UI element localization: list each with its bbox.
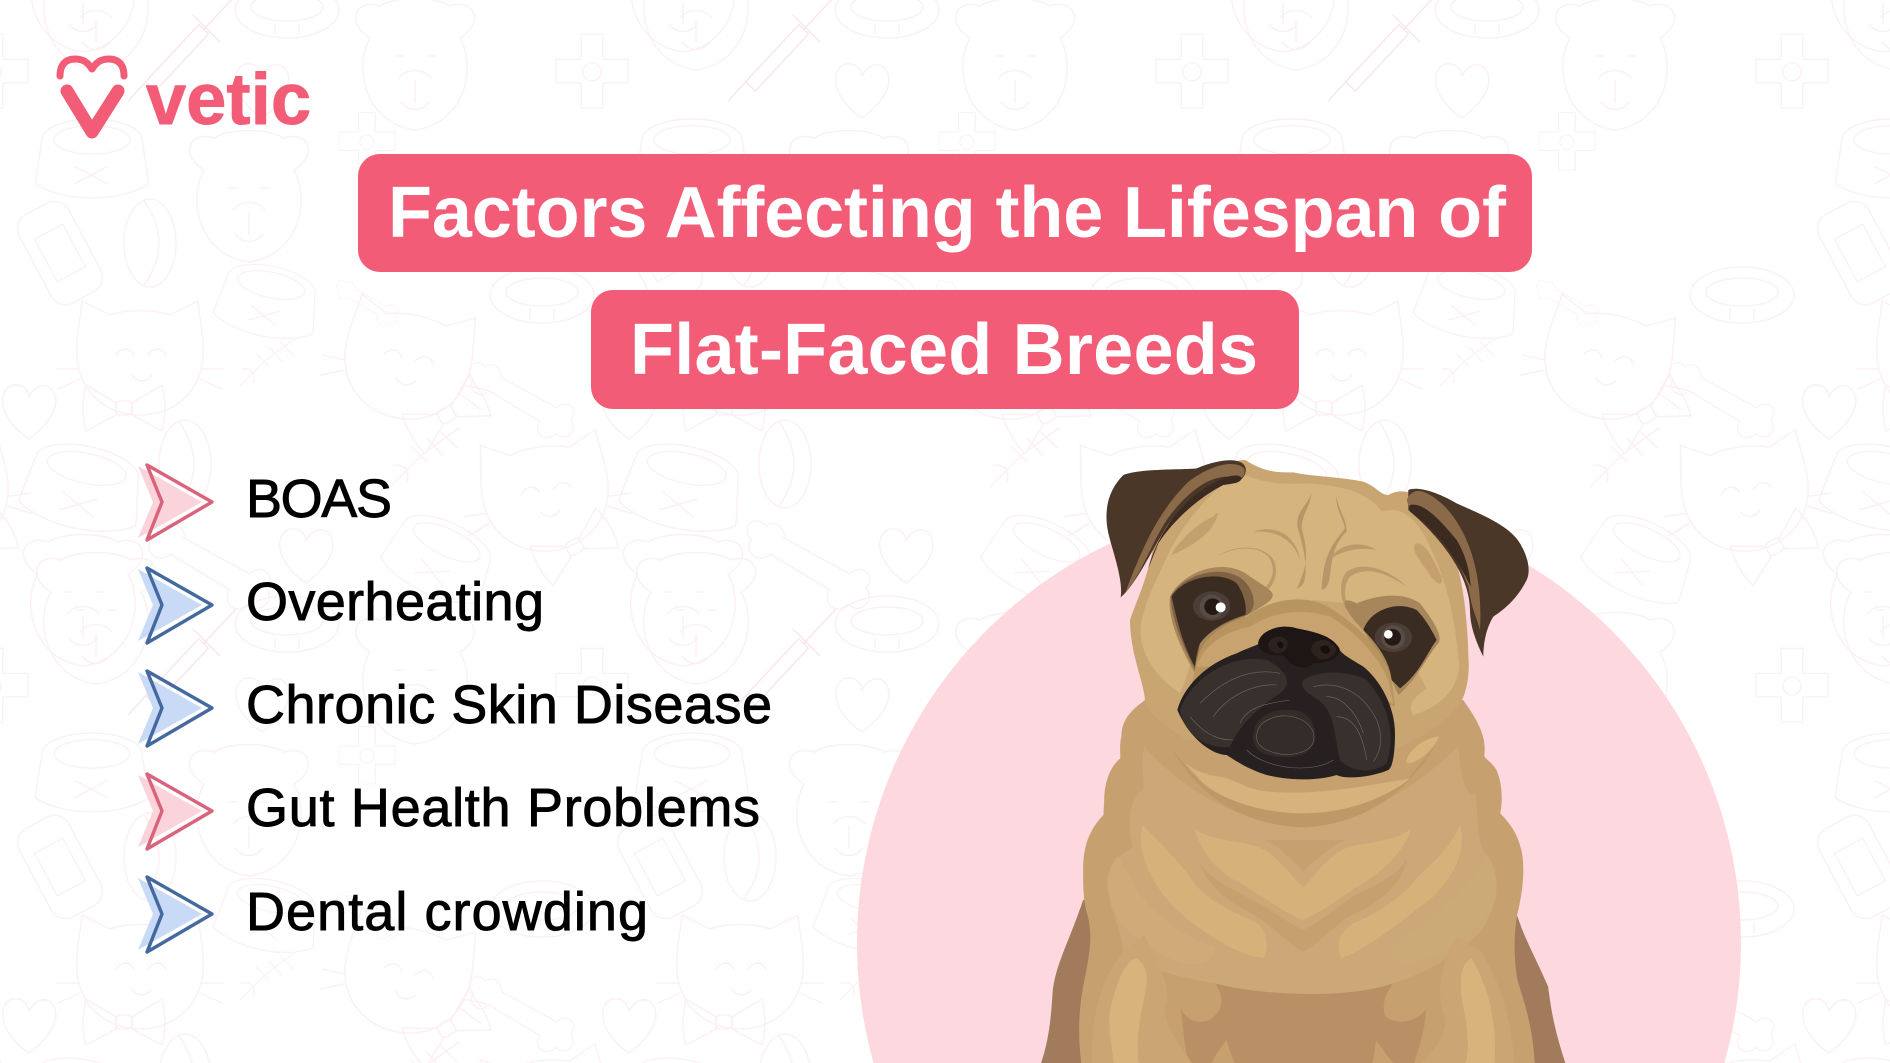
item: Overheating — [138, 568, 544, 643]
muzzle — [1177, 627, 1395, 779]
list of factors — [138, 465, 772, 952]
pug head — [1106, 460, 1529, 779]
title pill: line two — [591, 290, 1299, 409]
ear right — [1408, 489, 1529, 657]
item: Gut Health Problems: Gut Health Problems — [246, 778, 760, 838]
logo: vetic — [60, 59, 311, 140]
illustration: pug — [1041, 460, 1565, 1063]
eye socket left — [1170, 567, 1273, 673]
nose — [1258, 627, 1340, 668]
item: Gut Health Problems — [138, 774, 760, 849]
icon: blue arrow — [138, 568, 212, 643]
eye right — [1375, 623, 1412, 652]
item: Chronic Skin Disease — [138, 671, 772, 746]
item: Dental crowding: Dental crowding — [246, 882, 648, 942]
item: BOAS: BOAS — [246, 469, 392, 529]
eye socket right — [1345, 596, 1440, 695]
title pill: line one — [358, 154, 1532, 272]
item: Chronic Skin Disease: Chronic Skin Disease — [246, 675, 772, 735]
head base — [1130, 460, 1469, 750]
pink circle behind pug — [857, 501, 1741, 1063]
icon: blue arrow — [138, 671, 212, 746]
pug body — [1041, 700, 1565, 1063]
icon: blue arrow — [138, 877, 212, 952]
forehead wrinkles — [1297, 493, 1347, 590]
item: BOAS — [138, 465, 392, 540]
eye left — [1193, 591, 1230, 621]
logo wordmark: vetic — [146, 60, 311, 140]
icon: pink arrow — [138, 774, 212, 849]
title pill: line two: Flat-Faced Breeds — [630, 310, 1258, 390]
item: Dental crowding — [138, 877, 648, 952]
muzzle bridge — [1187, 599, 1395, 707]
ear left — [1106, 460, 1246, 597]
item: Overheating: Overheating — [246, 572, 544, 632]
title — [358, 154, 1532, 409]
icon: heart and V mark — [60, 59, 124, 132]
icon: pink arrow — [138, 465, 212, 540]
title pill: line one: Factors Affecting the Lifespan of — [388, 173, 1507, 253]
